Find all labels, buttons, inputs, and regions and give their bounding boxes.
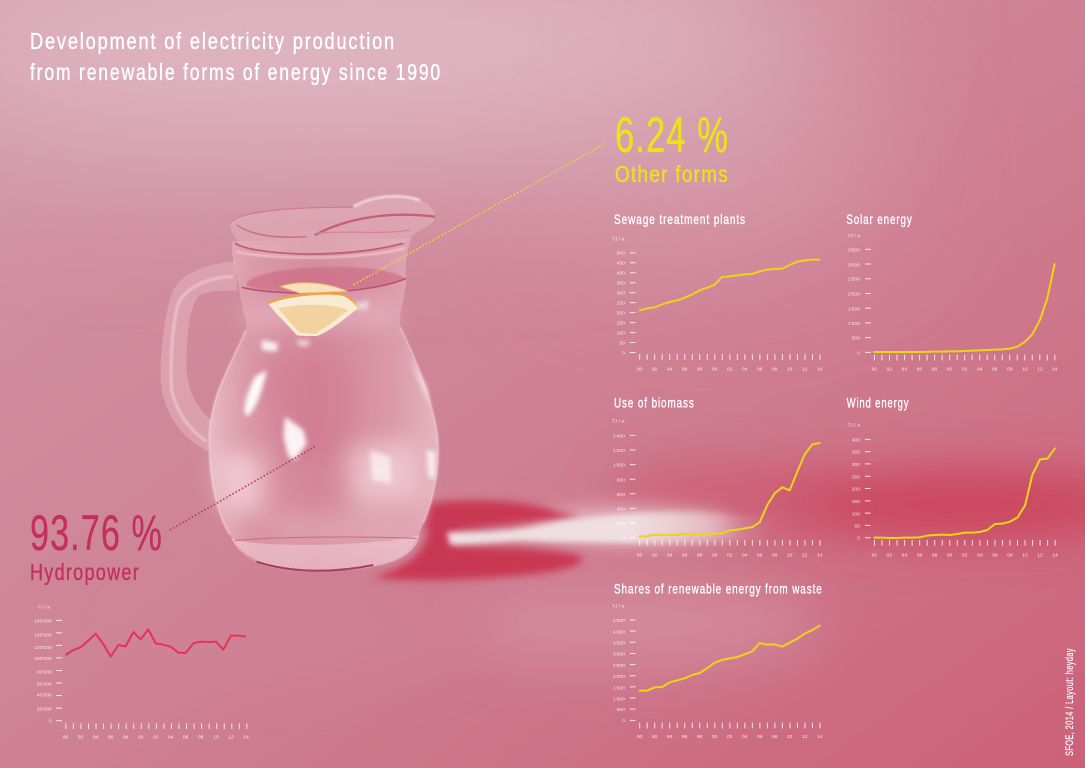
chart: sewage treatment plants: 96 xyxy=(682,367,688,373)
chart: sewage treatment plants: 12 xyxy=(802,367,808,373)
chart: use of biomass: 90 xyxy=(637,552,643,558)
chart: hydropower: 0 xyxy=(49,719,52,725)
chart: use of biomass: 200 xyxy=(617,521,625,527)
chart: wind energy: 50 xyxy=(854,524,860,530)
chart: shares of renewable energy from waste: 12 xyxy=(802,734,808,740)
chart: sewage treatment plants: Sewage treatment plants xyxy=(614,211,746,227)
chart: wind energy: 00 xyxy=(947,552,953,558)
chart: solar energy: 1'500 xyxy=(848,306,860,312)
title xyxy=(30,28,442,85)
rim xyxy=(230,196,435,255)
chart: hydropower: 12 xyxy=(228,735,234,741)
chart: wind energy: 04 xyxy=(977,552,983,558)
callout: hydropower: Hydropower xyxy=(30,559,140,585)
chart: sewage treatment plants: 0 xyxy=(622,350,625,356)
chart: shares of renewable energy from waste: 500 xyxy=(617,707,625,713)
chart: hydropower: 100'000 xyxy=(34,656,52,662)
glass outline xyxy=(209,330,246,535)
chart: sewage treatment plants: 500 xyxy=(617,251,625,257)
chart: solar energy: 06 xyxy=(992,367,998,373)
chart: sewage treatment plants: 10 xyxy=(787,367,793,373)
chart: solar energy: TJ / a xyxy=(848,233,860,239)
chart: sewage treatment plants: 50 xyxy=(619,340,625,346)
chart: shares of renewable energy from waste: 3'000 xyxy=(613,652,625,658)
chart: shares of renewable energy from waste: 08 xyxy=(772,734,778,740)
chart: use of biomass: 08 xyxy=(772,552,778,558)
jug body xyxy=(209,238,438,572)
chart: wind energy: 350 xyxy=(852,450,860,456)
chart: use of biomass: 02 xyxy=(727,552,733,558)
chart: shares of renewable energy from waste: 00 xyxy=(712,734,718,740)
jug handle xyxy=(161,261,237,452)
chart: shares of renewable energy from waste: TJ / a xyxy=(612,603,625,609)
callout: other forms: Other forms xyxy=(615,161,729,187)
chart: solar energy: Solar energy xyxy=(846,211,913,227)
chart: solar energy: 92 xyxy=(887,367,892,373)
chart: wind energy: 100 xyxy=(852,511,860,517)
chart: solar energy: 00 xyxy=(947,367,952,373)
jug base xyxy=(232,535,420,571)
chart: shares of renewable energy from waste: 4'500 xyxy=(613,618,625,624)
chart: solar energy: 08 xyxy=(1007,367,1013,373)
soft refraction patches xyxy=(215,307,420,550)
chart: sewage treatment plants: 06 xyxy=(757,367,763,373)
chart: wind energy: 10 xyxy=(1022,552,1028,558)
chart: hydropower: 14 xyxy=(243,735,249,741)
chart: shares of renewable energy from waste: 2'000 xyxy=(613,674,625,680)
water surface xyxy=(247,267,405,292)
chart: sewage treatment plants: 08 xyxy=(772,367,778,373)
chart: shares of renewable energy from waste: 1'500 xyxy=(613,685,625,691)
lemon slice xyxy=(280,283,348,293)
chart: shares of renewable energy from waste: 04 xyxy=(742,734,748,740)
chart: shares of renewable energy from waste: 3'500 xyxy=(613,641,625,647)
chart: shares of renewable energy from waste: 98 xyxy=(697,734,703,740)
chart: solar energy: 3'000 xyxy=(848,262,860,268)
chart: solar energy: 2'500 xyxy=(848,277,860,283)
chart: shares of renewable energy from waste: 96 xyxy=(682,734,688,740)
chart: wind energy: 150 xyxy=(852,499,860,505)
chart: solar energy: 10 xyxy=(1022,367,1028,373)
chart: use of biomass: 1'000 xyxy=(613,463,625,469)
jug shadow xyxy=(372,500,775,580)
chart: sewage treatment plants xyxy=(612,211,823,373)
chart: use of biomass: 400 xyxy=(617,507,625,513)
chart: sewage treatment plants: 94 xyxy=(667,367,673,373)
chart: wind energy: 250 xyxy=(852,474,860,480)
chart: hydropower: 92 xyxy=(78,735,84,741)
chart: sewage treatment plants: 00 xyxy=(712,367,718,373)
chart: hydropower: 98 xyxy=(123,735,129,741)
chart: shares of renewable energy from waste xyxy=(612,580,823,740)
chart: sewage treatment plants: 98 xyxy=(697,367,703,373)
credit: SFOE, 2014 / Layout: heyday xyxy=(1064,648,1076,756)
icon: glass jug with water and lemon xyxy=(161,196,438,572)
chart: shares of renewable energy from waste: Shares of renewable energy from waste xyxy=(614,580,823,596)
chart: wind energy: 08 xyxy=(1007,552,1013,558)
chart: solar energy xyxy=(846,211,1058,373)
chart: hydropower: 10 xyxy=(213,735,219,741)
chart: use of biomass: 04 xyxy=(742,552,748,558)
chart: use of biomass xyxy=(612,394,823,558)
callout: other forms xyxy=(615,107,729,187)
chart: wind energy: 06 xyxy=(992,552,998,558)
chart: use of biomass: 1'200 xyxy=(613,448,625,454)
chart: use of biomass: TJ / a xyxy=(612,418,625,424)
chart: hydropower: 02 xyxy=(153,735,159,741)
chart: hydropower: 160'000 xyxy=(34,619,52,625)
chart: wind energy: 400 xyxy=(852,437,860,443)
chart: wind energy: 92 xyxy=(887,552,892,558)
chart: use of biomass: 800 xyxy=(617,477,625,483)
chart: use of biomass: 1'400 xyxy=(613,433,625,439)
chart: shares of renewable energy from waste: 4'000 xyxy=(613,630,625,636)
chart: wind energy: Wind energy xyxy=(847,394,909,410)
chart: wind energy: 90 xyxy=(872,552,877,558)
chart: use of biomass: 600 xyxy=(617,492,625,498)
chart: hydropower: 08 xyxy=(198,735,204,741)
chart: wind energy: TJ / a xyxy=(848,423,860,429)
chart: hydropower: 140'000 xyxy=(34,632,52,638)
chart: sewage treatment plants: 92 xyxy=(652,367,658,373)
dotted leader: hydropower xyxy=(170,446,316,530)
chart: hydropower: 04 xyxy=(168,735,174,741)
chart: wind energy: 0 xyxy=(857,536,860,542)
chart: use of biomass: 96 xyxy=(682,552,688,558)
callout: hydropower: 93.76 % xyxy=(30,505,163,561)
chart: use of biomass: Use of biomass xyxy=(614,394,695,410)
callout: hydropower xyxy=(30,505,163,585)
chart: hydropower: 00 xyxy=(138,735,144,741)
chart: sewage treatment plants: 250 xyxy=(617,301,625,307)
chart: wind energy: 94 xyxy=(902,552,907,558)
chart: sewage treatment plants: 200 xyxy=(617,311,625,317)
glass highlights xyxy=(245,300,435,483)
chart: hydropower: 40'000 xyxy=(37,693,52,699)
darker core xyxy=(257,350,355,464)
chart: wind energy: 300 xyxy=(852,462,860,468)
chart: shares of renewable energy from waste: 2'500 xyxy=(613,663,625,669)
chart: wind energy xyxy=(847,394,1058,558)
chart: wind energy: 14 xyxy=(1052,552,1058,558)
chart: wind energy: 12 xyxy=(1037,552,1043,558)
chart: shares of renewable energy from waste: 06 xyxy=(757,734,763,740)
chart: sewage treatment plants: 14 xyxy=(817,367,823,373)
chart: use of biomass: 10 xyxy=(787,552,793,558)
dotted leader: other forms xyxy=(353,143,606,285)
chart: sewage treatment plants: 04 xyxy=(742,367,748,373)
chart: solar energy: 98 xyxy=(932,367,937,373)
chart: shares of renewable energy from waste: 02 xyxy=(727,734,733,740)
chart: wind energy: 200 xyxy=(852,487,860,493)
chart: hydropower: TJ / a xyxy=(38,605,50,611)
chart: wind energy: 02 xyxy=(962,552,968,558)
chart: solar energy: 500 xyxy=(852,336,860,342)
chart: hydropower: 20'000 xyxy=(37,706,52,712)
chart: hydropower: 60'000 xyxy=(37,682,52,688)
chart: sewage treatment plants: 100 xyxy=(617,331,625,337)
chart: use of biomass: 06 xyxy=(757,552,763,558)
chart: use of biomass: 0 xyxy=(622,536,625,542)
chart: solar energy: 0 xyxy=(857,350,860,356)
chart: shares of renewable energy from waste: 10 xyxy=(787,734,793,740)
title: from renewable forms of energy since 1990 xyxy=(30,59,442,85)
chart: shares of renewable energy from waste: 94 xyxy=(667,734,673,740)
chart: sewage treatment plants: 02 xyxy=(727,367,733,373)
chart: hydropower: 90 xyxy=(63,735,69,741)
chart: wind energy: 98 xyxy=(932,552,938,558)
chart: use of biomass: 12 xyxy=(802,552,808,558)
chart: use of biomass: 00 xyxy=(712,552,718,558)
callout: other forms: 6.24 % xyxy=(615,107,729,163)
chart: sewage treatment plants: 300 xyxy=(617,291,625,297)
chart: solar energy: 90 xyxy=(872,367,877,373)
chart: solar energy: 04 xyxy=(977,367,983,373)
chart: solar energy: 96 xyxy=(917,367,922,373)
chart: sewage treatment plants: 150 xyxy=(617,321,625,327)
chart: shares of renewable energy from waste: 14 xyxy=(817,734,823,740)
chart: use of biomass: 14 xyxy=(817,552,823,558)
chart: solar energy: 3'500 xyxy=(848,247,860,253)
chart: wind energy: 96 xyxy=(917,552,923,558)
chart: solar energy: 2'000 xyxy=(848,292,860,298)
chart: hydropower: 06 xyxy=(183,735,189,741)
chart: shares of renewable energy from waste: 92 xyxy=(652,734,658,740)
chart: hydropower xyxy=(34,605,249,741)
chart: sewage treatment plants: 90 xyxy=(637,367,643,373)
chart: solar energy: 14 xyxy=(1052,367,1058,373)
chart: use of biomass: 92 xyxy=(652,552,658,558)
chart: sewage treatment plants: 450 xyxy=(617,261,625,267)
chart: solar energy: 94 xyxy=(902,367,907,373)
chart: sewage treatment plants: 350 xyxy=(617,281,625,287)
chart: use of biomass: 94 xyxy=(667,552,673,558)
chart: shares of renewable energy from waste: 90 xyxy=(637,734,643,740)
chart: use of biomass: 98 xyxy=(697,552,703,558)
chart: hydropower: 96 xyxy=(108,735,114,741)
chart: sewage treatment plants: TJ / a xyxy=(612,236,625,242)
chart: solar energy: 1'000 xyxy=(848,321,860,327)
chart: solar energy: 02 xyxy=(962,367,968,373)
chart: hydropower: 94 xyxy=(93,735,99,741)
chart: solar energy: 12 xyxy=(1037,367,1043,373)
chart: sewage treatment plants: 400 xyxy=(617,271,625,277)
chart: shares of renewable energy from waste: 0 xyxy=(622,718,625,724)
chart: shares of renewable energy from waste: 1'000 xyxy=(613,696,625,702)
chart: hydropower: 120'000 xyxy=(34,645,52,651)
handle edge highlights xyxy=(171,277,233,442)
title: Development of electricity production xyxy=(30,28,396,54)
chart: hydropower: 80'000 xyxy=(37,669,52,675)
